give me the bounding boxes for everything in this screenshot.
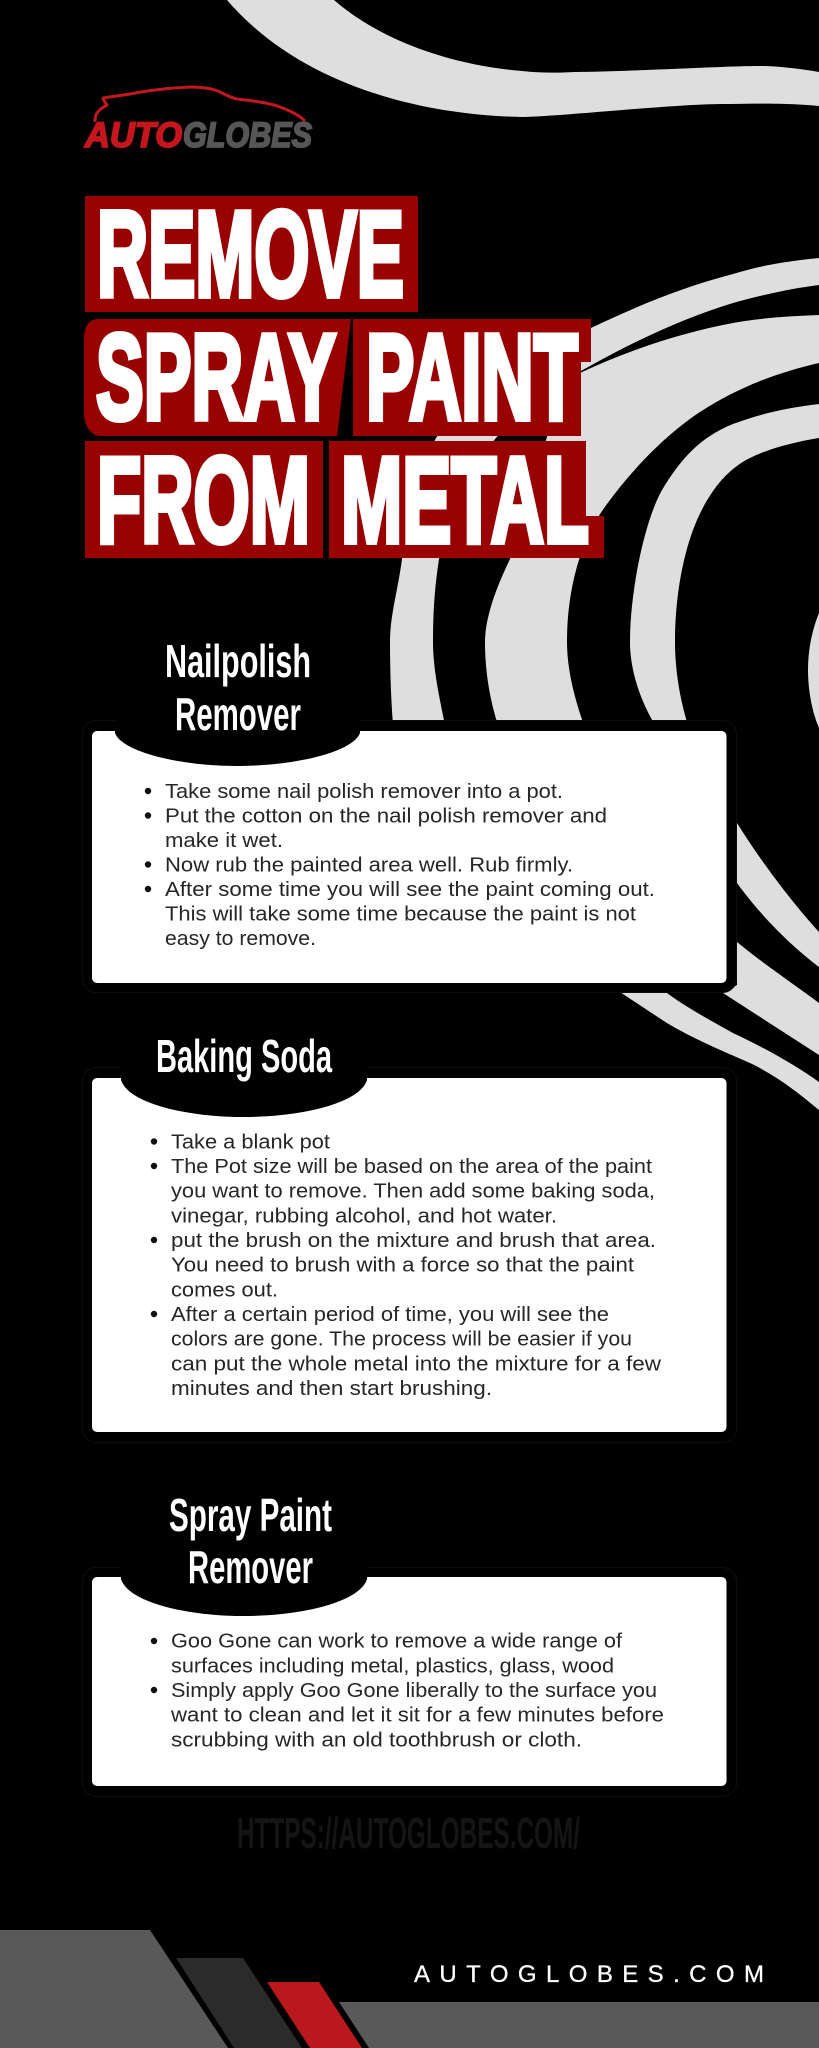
heading: spray paint remover	[169, 1489, 332, 1593]
title highlight shapes	[84, 196, 604, 558]
bullet list: baking soda steps: can put the whole metal into the mixture for a few	[171, 1352, 661, 1375]
heading: nailpolish remover: Nailpolish	[165, 635, 311, 687]
bullet list: baking soda steps: comes out.	[171, 1278, 278, 1301]
bullet list: nailpolish steps: Now rub the painted area well. Rub firmly.	[165, 854, 573, 876]
bullet list: spray paint remover steps: surfaces including metal, plastics, glass, wood	[171, 1654, 614, 1677]
bullet list: spray paint remover steps: want to clean and let it sit for a few minutes before	[170, 1704, 664, 1727]
bullet list: baking soda steps: minutes and then start brushing.	[171, 1377, 492, 1400]
heading: nailpolish remover: Remover	[175, 688, 301, 740]
footer shapes	[0, 1930, 819, 2048]
bullet list: nailpolish steps: Put the cotton on the nail polish remover and	[165, 804, 607, 828]
bullet list: nailpolish steps	[145, 780, 655, 950]
title text: line 1: REMOVE	[97, 186, 404, 322]
logo: Autoglobes	[84, 87, 312, 155]
bullet list: spray paint remover steps: scrubbing with an old toothbrush or cloth.	[171, 1728, 582, 1751]
heading: baking soda: Baking Soda	[156, 1030, 332, 1082]
bullet list: baking soda steps: put the brush on the mixture and brush that area.	[171, 1229, 656, 1252]
heading: spray paint remover: Remover	[188, 1541, 313, 1593]
bullet list: baking soda steps: After a certain period of time, you will see the	[171, 1303, 609, 1326]
bullet list: nailpolish steps: make it wet.	[165, 829, 283, 852]
bullet list: baking soda steps	[151, 1130, 661, 1400]
title text: line 2 word 1: SPRAY	[96, 309, 336, 445]
logo wordmark: GLOBES	[183, 116, 312, 155]
bullet list: spray paint remover steps	[151, 1630, 664, 1751]
heading: spray paint remover: Spray Paint	[169, 1489, 332, 1541]
bullet list: spray paint remover steps: Goo Gone can work to remove a wide range of	[171, 1630, 622, 1653]
title text: line 3 word 2: METAL	[341, 432, 589, 568]
icon: car outline	[95, 87, 305, 122]
bullet list: baking soda steps: vinegar, rubbing alcohol, and hot water.	[171, 1204, 557, 1227]
panel: nailpolish remover	[82, 635, 736, 992]
footer website label: AUTOGLOBES.COM	[414, 1961, 764, 1988]
bullet list: baking soda steps: colors are gone. The process will be easier if you	[171, 1328, 632, 1351]
title text: line 3 word 1: FROM	[97, 432, 310, 568]
title block	[84, 186, 604, 568]
bullet list: spray paint remover steps: Simply apply Goo Gone liberally to the surface you	[171, 1679, 657, 1702]
title text: line 2 word 2: PAINT	[366, 309, 578, 445]
bullet list: nailpolish steps: Take some nail polish remover into a pot.	[165, 780, 563, 803]
bullet list: baking soda steps: The Pot size will be based on the area of the paint	[171, 1155, 652, 1178]
bullet list: baking soda steps: you want to remove. Then add some baking soda,	[171, 1180, 655, 1203]
logo wordmark: AUTO	[84, 116, 182, 155]
bullet list: baking soda steps: You need to brush with a force so that the paint	[171, 1254, 634, 1277]
bullet list: nailpolish steps: After some time you will see the paint coming out.	[165, 878, 655, 901]
bullet list: nailpolish steps: This will take some time because the paint is not	[165, 902, 636, 926]
bullet list: nailpolish steps: easy to remove.	[165, 927, 316, 950]
panel: baking soda	[82, 1030, 736, 1442]
logo wordmark	[84, 116, 312, 155]
background swirl bands	[227, 0, 819, 1110]
bullet list: baking soda steps: Take a blank pot	[171, 1130, 330, 1153]
panel: spray paint remover	[82, 1489, 736, 1796]
heading: nailpolish remover	[165, 635, 311, 740]
